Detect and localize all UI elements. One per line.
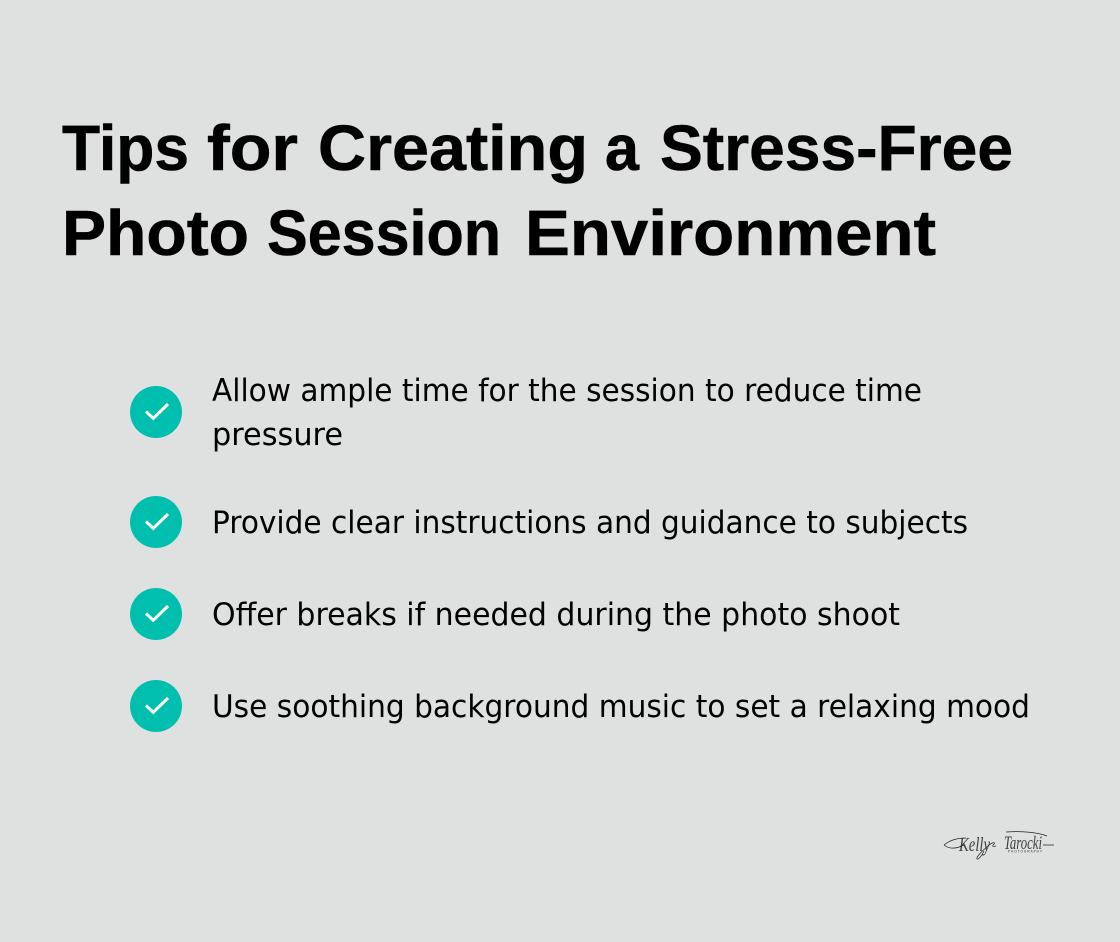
text: item 4: Use soothing background music to set a relaxing mood: [212, 689, 1030, 725]
text: item 1: Allow ample time for the session to reduce time: [212, 373, 922, 409]
item 1: allow ample time: [130, 373, 922, 453]
title: Photo: [62, 197, 249, 269]
icon: check circle 2: [130, 496, 182, 548]
item 4: soothing music: [130, 680, 1030, 732]
title: Session: [267, 197, 501, 269]
icon: check circle 1: [130, 386, 182, 438]
text: item 1: pressure: [212, 417, 343, 453]
logo: signature: [944, 832, 1054, 859]
logo: signature: Kelly: [958, 834, 990, 856]
checklist: [130, 373, 1030, 732]
logo: signature: Tarocki: [1004, 833, 1042, 854]
title: Tips: [62, 112, 189, 184]
title: for: [207, 112, 298, 184]
logo: signature: PHOTOGRAPHY: [1008, 850, 1043, 854]
icon: check circle 3: [130, 588, 182, 640]
title: Environment: [525, 197, 936, 269]
title: [62, 112, 1013, 269]
title: Stress-Free: [660, 112, 1013, 184]
title: a: [605, 112, 639, 184]
text: item 3: Offer breaks if needed during the photo shoot: [212, 597, 900, 633]
icon: check circle 4: [130, 680, 182, 732]
text: item 1: [212, 373, 922, 453]
text: item 2: Provide clear instructions and guidance to subjects: [212, 505, 968, 541]
item 2: clear instructions: [130, 496, 968, 548]
item 3: offer breaks: [130, 588, 900, 640]
title: Creating: [318, 112, 588, 184]
